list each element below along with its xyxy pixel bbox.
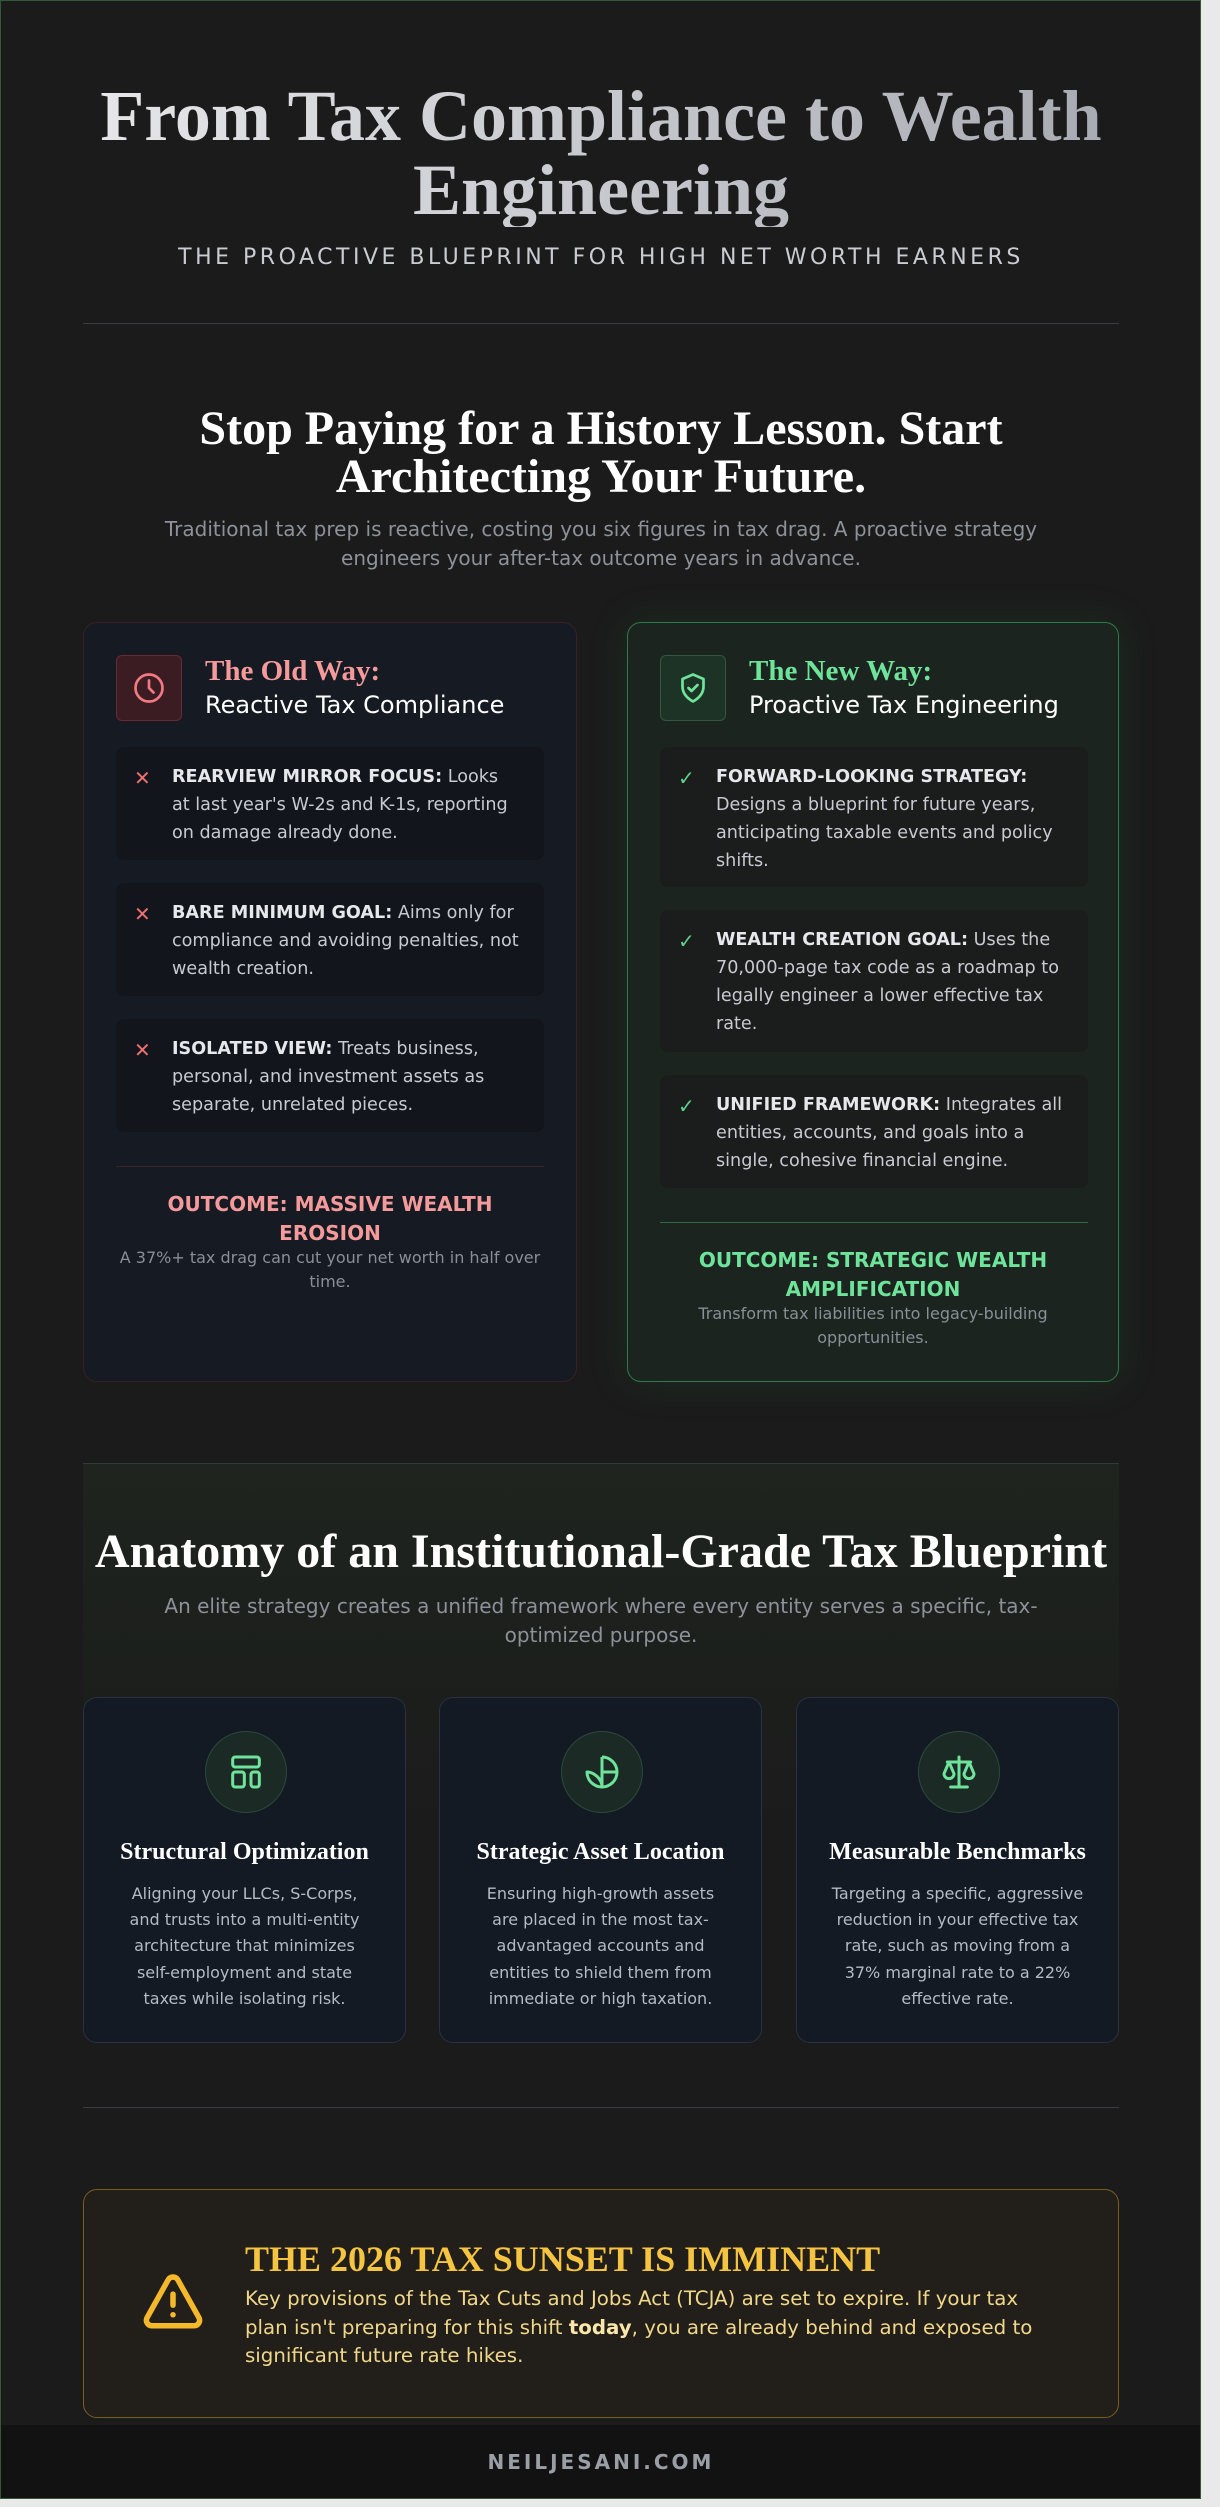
item: isolated: separate, unrelated pieces.: [172, 1095, 413, 1115]
text: 37% marginal rate to a 22%: [845, 1963, 1070, 1982]
anatomy heading: Anatomy of an Institutional-Grade Tax Blueprint: [95, 1525, 1107, 1578]
subtitle: THE PROACTIVE BLUEPRINT FOR HIGH NET WORTH EARNERS: [178, 245, 1024, 270]
alert text: Key provisions of the Tax Cuts and Jobs Act (TCJA) are set to expire. If your tax: [245, 2287, 1018, 2310]
outcome note: A 37%+ tax drag can cut your net worth in half over: [120, 1248, 540, 1267]
intro text: [164, 517, 1037, 570]
anatomy description: [164, 1594, 1038, 1647]
item: wealth creation: [660, 910, 1088, 1052]
outcome note: opportunities.: [817, 1328, 929, 1347]
text: reduction in your effective tax: [837, 1910, 1078, 1929]
title: Strategic Asset Location: [477, 1839, 724, 1865]
old way subheading: Reactive Tax Compliance: [205, 691, 504, 719]
card: benchmarks: [796, 1697, 1119, 2043]
alert text: plan isn't preparing for this shift today, you are already behind and exposed to: [245, 2316, 1032, 2338]
text: Aligning your LLCs, S-Corps, and trusts into a multi-entity architecture that minimizes self-employment and state taxes while isolating risk.: [130, 1884, 359, 2008]
text: Targeting a specific, aggressive: [832, 1884, 1083, 1903]
item: unified: entities, accounts, and goals into a: [716, 1123, 1024, 1143]
item: wealth creation: 70,000-page tax code as a roadmap to: [716, 958, 1059, 978]
title: Measurable Benchmarks: [829, 1839, 1086, 1865]
heading: stop paying: Architecting Your Future.: [336, 450, 866, 503]
title: From Tax Compliance to Wealth: [100, 76, 1102, 156]
item: wealth creation: rate.: [716, 1014, 757, 1034]
item: forward looking: [660, 747, 1088, 887]
footer: NEILJESANI.COM: [488, 2450, 714, 2474]
icon: clock: [116, 655, 182, 721]
item: forward looking: Designs a blueprint for future years,: [716, 795, 1035, 815]
item: bare minimum: compliance and avoiding penalties, not: [172, 931, 519, 951]
text: effective rate.: [901, 1989, 1014, 2008]
icon: warning: [144, 2274, 202, 2328]
old way heading: The Old Way:: [205, 655, 380, 687]
item: bare minimum: wealth creation.: [172, 959, 314, 979]
item: unified: single, cohesive financial engine.: [716, 1151, 1008, 1171]
heading: stop paying: [199, 402, 1003, 503]
intro text: engineers your after-tax outcome years in advance.: [341, 546, 861, 570]
text: rate, such as moving from a: [845, 1936, 1070, 1955]
item: rearview: [116, 747, 544, 860]
item: rearview: at last year's W-2s and K-1s, reporting: [172, 795, 508, 815]
alert text: significant future rate hikes.: [245, 2344, 523, 2367]
heading: stop paying: Stop Paying for a History Lesson. Start: [199, 402, 1003, 455]
title: Structural Optimization: [120, 1839, 369, 1865]
new way heading: The New Way:: [749, 655, 932, 687]
outcome: erosion: OUTCOME: MASSIVE WEALTH: [168, 1192, 492, 1216]
intro text: Traditional tax prep is reactive, costing you six figures in tax drag. A proactive strategy: [165, 517, 1037, 541]
outcome: amplification: OUTCOME: STRATEGIC WEALTH: [699, 1248, 1047, 1272]
outcome note: Transform tax liabilities into legacy-building: [698, 1304, 1048, 1323]
outcome: erosion: [168, 1192, 492, 1245]
card: asset location: [439, 1697, 762, 2043]
new way subheading: Proactive Tax Engineering: [749, 691, 1059, 719]
outcome: amplification: AMPLIFICATION: [786, 1277, 960, 1301]
item: isolated: ISOLATED VIEW: Treats business,: [172, 1039, 479, 1059]
item: unified: [660, 1075, 1088, 1188]
item: rearview: on damage already done.: [172, 823, 398, 843]
outcome note: time.: [309, 1272, 351, 1291]
item: isolated: ✕: [134, 1038, 151, 1062]
card: structural optimization: [83, 1697, 406, 2043]
anatomy description: optimized purpose.: [505, 1623, 697, 1647]
outcome: erosion: EROSION: [279, 1221, 381, 1245]
icon: scale: [918, 1731, 1000, 1813]
item: forward looking: FORWARD-LOOKING STRATEGY:: [716, 767, 1027, 787]
item: unified: UNIFIED FRAMEWORK: Integrates all: [716, 1095, 1062, 1115]
anatomy description: An elite strategy creates a unified framework where every entity serves a specific, tax-: [164, 1594, 1038, 1618]
item: forward looking: ✓: [678, 766, 695, 790]
title: [1, 79, 1201, 227]
panel: old way: [83, 622, 577, 1382]
outcome note: [698, 1304, 1048, 1347]
item: forward looking: shifts.: [716, 851, 769, 871]
text: [832, 1884, 1083, 2008]
section: anatomy: [83, 1463, 1119, 2063]
item: bare minimum: BARE MINIMUM GOAL: Aims only for: [172, 903, 514, 923]
outcome note: [120, 1248, 540, 1291]
alert text: [245, 2287, 1032, 2367]
title: Engineering: [413, 150, 789, 230]
item: wealth creation: WEALTH CREATION GOAL: Uses the: [716, 930, 1050, 950]
item: bare minimum: [116, 883, 544, 996]
item: forward looking: anticipating taxable events and policy: [716, 823, 1053, 843]
item: unified: ✓: [678, 1094, 695, 1118]
footer: [1, 2425, 1201, 2500]
item: wealth creation: ✓: [678, 929, 695, 953]
icon: pie: [561, 1731, 643, 1813]
item: wealth creation: legally engineer a lower effective tax: [716, 986, 1043, 1006]
alert heading: THE 2026 TAX SUNSET IS IMMINENT: [245, 2239, 880, 2279]
item: isolated: personal, and investment assets as: [172, 1067, 484, 1087]
item: rearview: REARVIEW MIRROR FOCUS: Looks: [172, 767, 498, 787]
item: bare minimum: ✕: [134, 902, 151, 926]
item: rearview: ✕: [134, 766, 151, 790]
outcome: amplification: [699, 1248, 1047, 1301]
text: Ensuring high-growth assets are placed in the most tax-advantaged accounts and entities to shield them from immediate or high taxation.: [487, 1884, 714, 2008]
item: isolated: [116, 1019, 544, 1132]
icon: shield: [660, 655, 726, 721]
panel: new way: [627, 622, 1119, 1382]
alert: tax sunset: [83, 2189, 1119, 2418]
icon: layout: [205, 1731, 287, 1813]
